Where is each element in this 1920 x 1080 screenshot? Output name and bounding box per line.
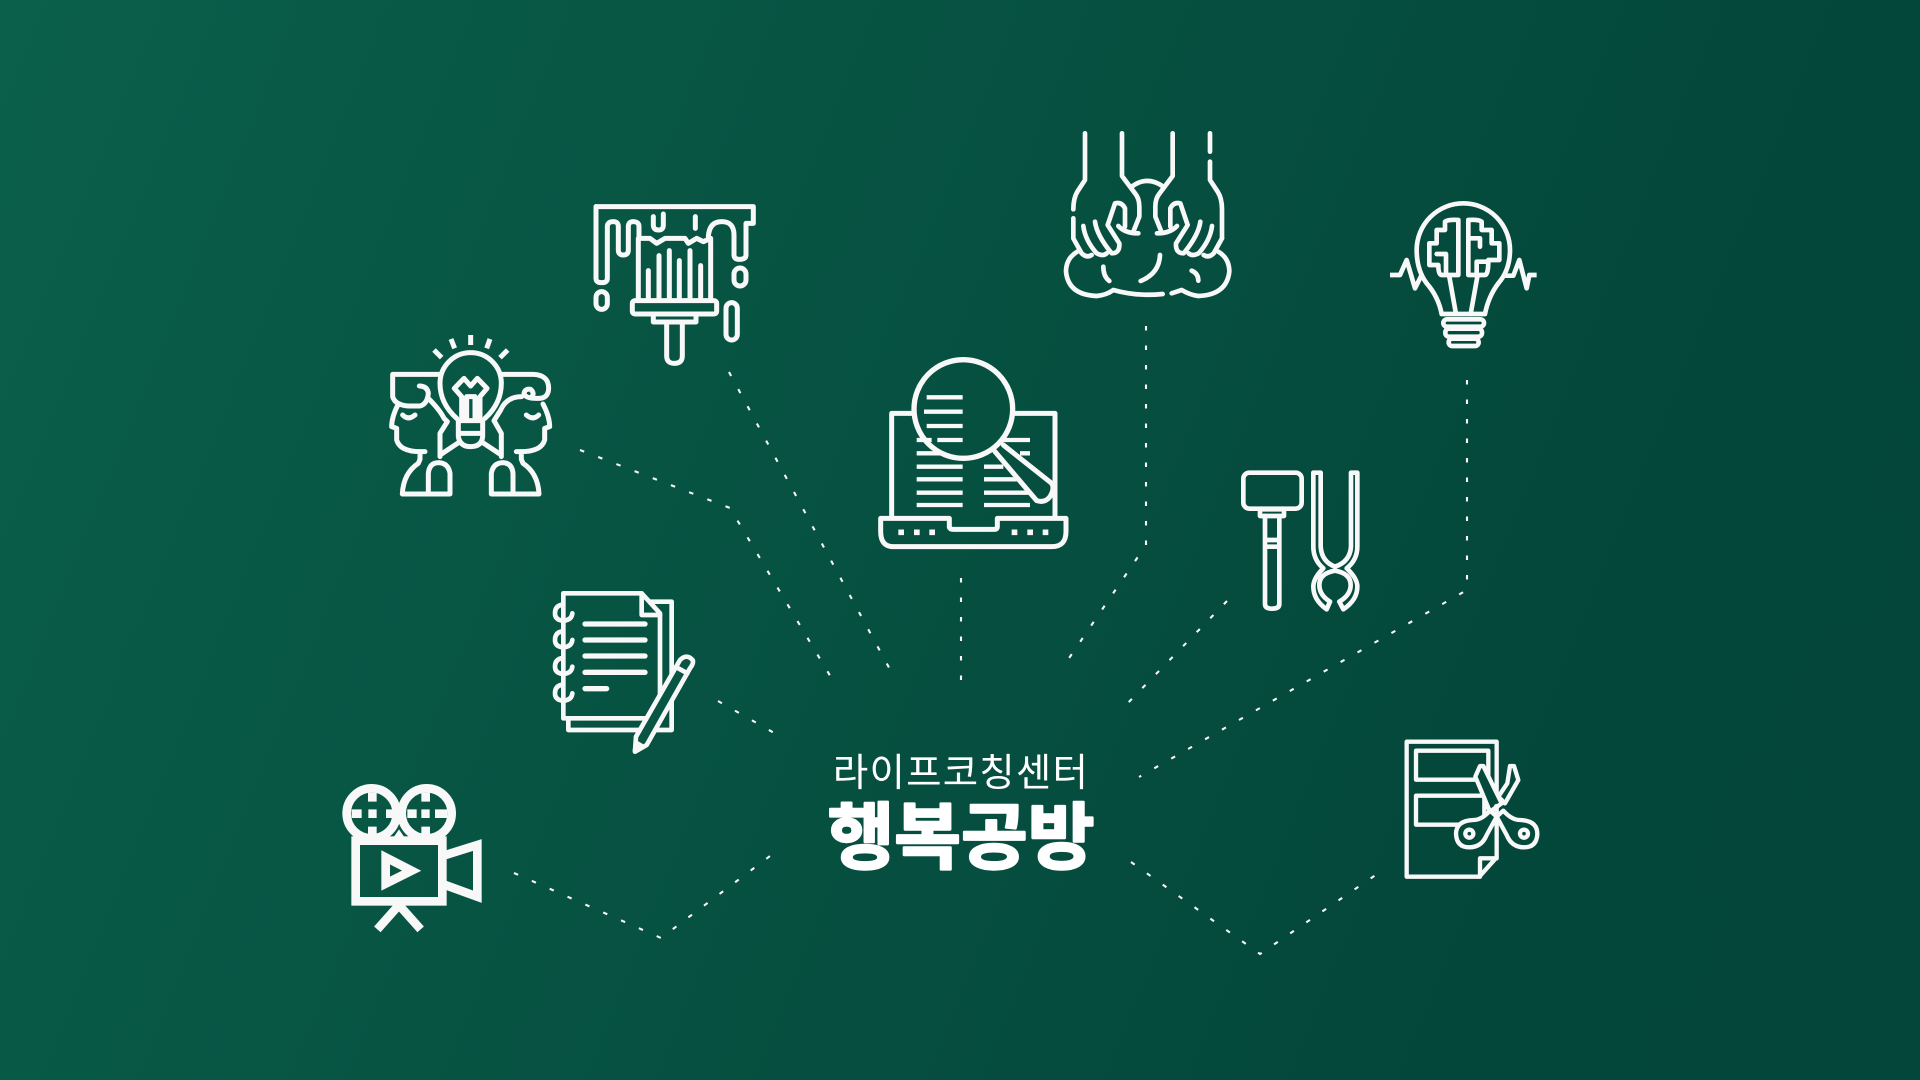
subtitle: life coaching centre: 라이프코칭센터 bbox=[833, 752, 1089, 795]
icon: mallet and tongs bbox=[1243, 473, 1357, 609]
icon: spiral notebook and pencil bbox=[555, 593, 693, 752]
connector: notebook icon to centre bbox=[718, 701, 776, 734]
icon: document with scissors bbox=[1407, 742, 1537, 877]
icon: film camera on tripod bbox=[347, 788, 477, 929]
dotted connector lines bbox=[514, 326, 1467, 954]
connector: hands icon to centre bbox=[1063, 326, 1146, 667]
connector: document scissors icon to centre bbox=[1131, 862, 1380, 954]
icon: two heads sharing a light bulb idea bbox=[392, 335, 550, 494]
connector: paintbrush icon to centre bbox=[729, 372, 893, 675]
connector: film camera icon to centre bbox=[514, 853, 774, 938]
connector: tools icon to centre bbox=[1124, 601, 1227, 707]
connector: laptop icon to centre bbox=[960, 578, 962, 682]
icon: light bulb with brain and pulse bbox=[1390, 203, 1537, 346]
icon: paint brush with dripping paint bbox=[596, 207, 753, 363]
icon: laptop with magnifying glass bbox=[881, 360, 1066, 547]
connector: heads icon to centre bbox=[580, 450, 835, 684]
title: happiness workshop: 행복공방 bbox=[828, 798, 1094, 879]
icon: hands kneading dough bbox=[1066, 133, 1229, 296]
connector: brain bulb icon to centre bbox=[1139, 380, 1467, 777]
